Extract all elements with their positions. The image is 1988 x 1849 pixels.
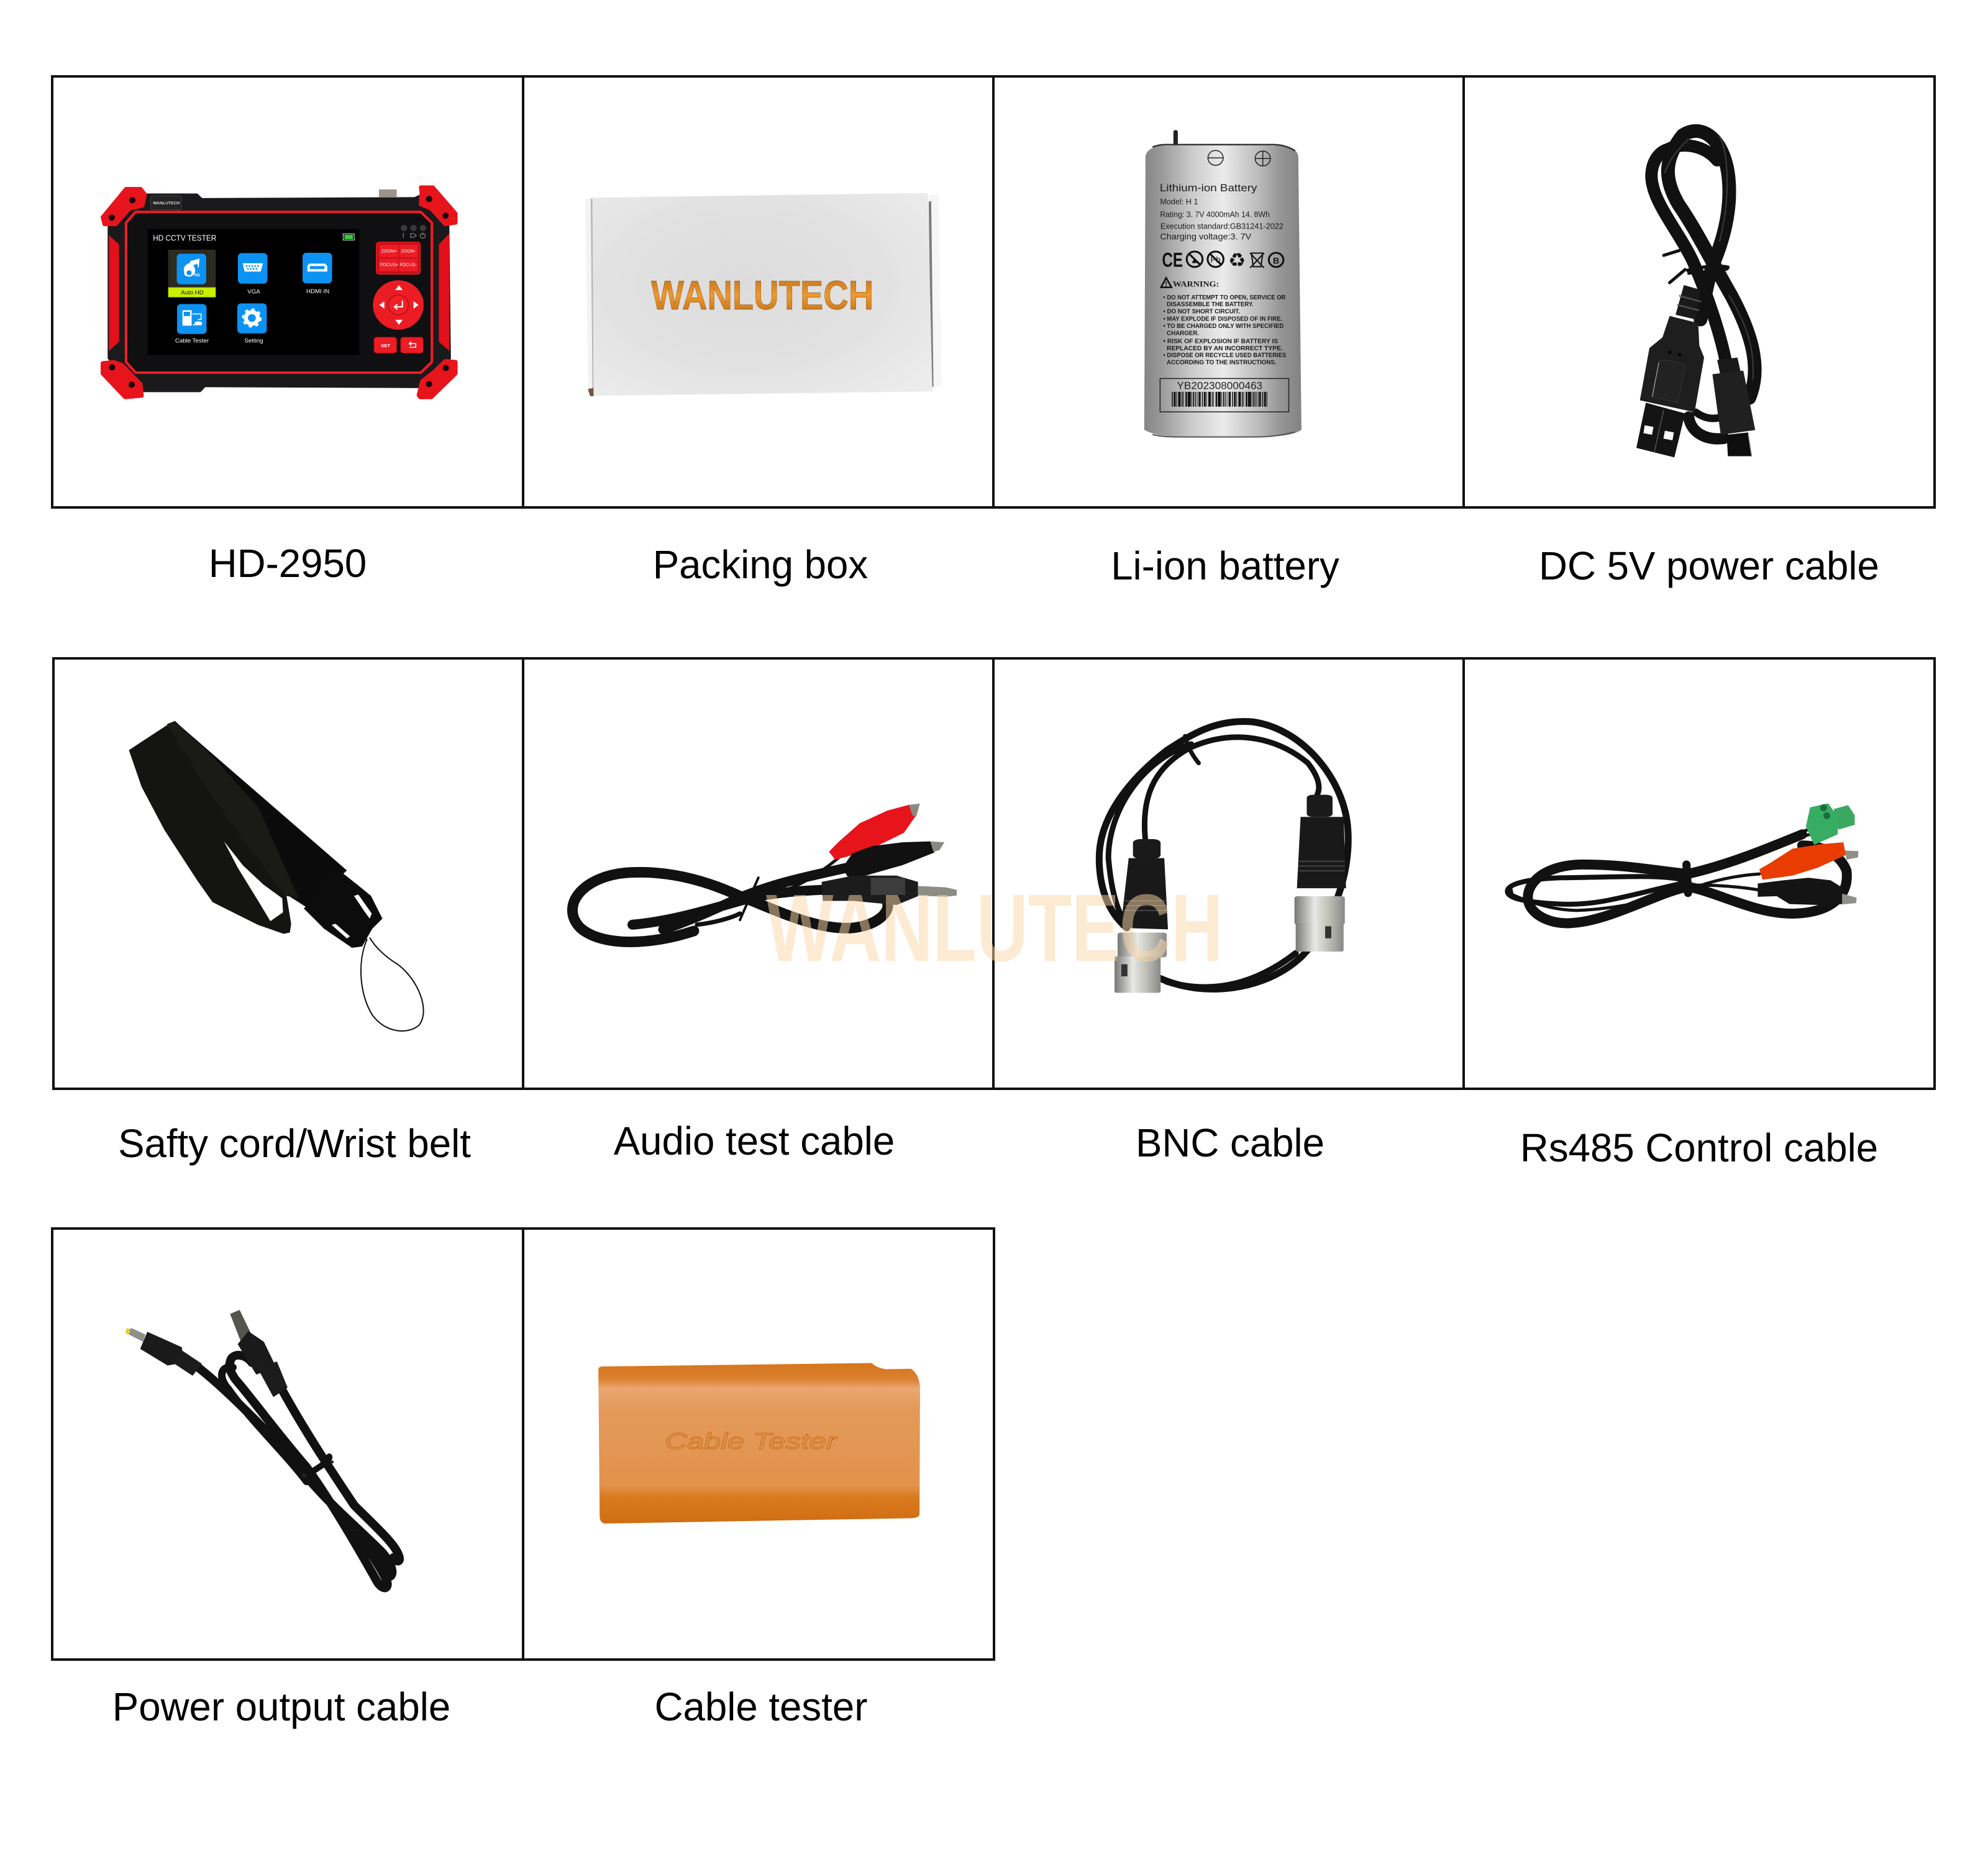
caption: Audio test cable (614, 1119, 895, 1163)
battery label text: Rating: 3. 7V 4000mAh 14. 8Wh (1160, 210, 1270, 219)
orange cable tester module (598, 1363, 920, 1524)
panel: BNC cable (993, 658, 1464, 1165)
caption: Packing box (653, 543, 868, 587)
device buttons (373, 242, 424, 353)
device screen: HDMI IN (306, 288, 329, 295)
device buttons: FOCUS- (399, 263, 417, 267)
panel: power output cable (52, 1229, 523, 1729)
device screen: HD (194, 274, 201, 278)
device buttons: FOCUS+ (380, 263, 398, 267)
panel: safety cord and wrist belt (53, 658, 523, 1166)
battery warning: • TO BE CHARGED ONLY WITH SPECIFIED (1163, 323, 1284, 330)
battery warning: • DO NOT SHORT CIRCUIT. (1163, 309, 1240, 315)
BNC cable with two connectors (1099, 722, 1348, 993)
molded label: Cable Tester (665, 1429, 837, 1454)
caption: HD-2950 (209, 542, 367, 586)
device screen: VGA (247, 289, 260, 296)
box brand text: WANLUTECH (651, 272, 873, 318)
panel frame (523, 658, 993, 1089)
panel: DC 5V power cable (1464, 76, 1935, 588)
battery warning: • DISPOSE OR RECYCLE USED BATTERIES (1163, 352, 1287, 359)
DC power cable (125, 1310, 399, 1588)
panel frame (1464, 76, 1935, 507)
device screen: Auto HD (181, 289, 204, 296)
battery barcode: YB202308000463 (1177, 380, 1262, 391)
battery warning: • DO NOT ATTEMPT TO OPEN, SERVICE OR (1163, 294, 1285, 301)
USB to Type-C cable (1636, 131, 1755, 457)
battery label text: Charging voltage:3. 7V (1160, 232, 1252, 242)
device buttons: ZOOM+ (381, 250, 397, 253)
panel frame (1464, 658, 1935, 1089)
panel: audio test cable (523, 658, 993, 1163)
device: HD CCTV tester (103, 187, 455, 398)
caption: BNC cable (1136, 1121, 1325, 1165)
caption: DC 5V power cable (1539, 544, 1879, 588)
panel: Li-ion battery (993, 76, 1464, 588)
battery warning: DISASSEMBLE THE BATTERY. (1167, 301, 1254, 308)
battery warning: • MAY EXPLODE IF DISPOSED OF IN FIRE. (1163, 316, 1283, 322)
white packing box (585, 193, 941, 396)
panel: HD-2950 (52, 76, 523, 586)
battery label text (1160, 181, 1284, 242)
watermark: WANLUTECH (766, 875, 1223, 981)
device buttons: ZOOM- (401, 250, 416, 253)
caption: Safty cord/Wrist belt (118, 1122, 471, 1166)
panel frame (993, 658, 1464, 1089)
caption: Power output cable (112, 1685, 450, 1729)
panel frame (53, 658, 523, 1089)
battery warning (1161, 278, 1287, 366)
RS485 cable with terminal block and clips (1507, 803, 1859, 923)
device buttons: SET (381, 343, 391, 348)
battery warning: ACCORDING TO THE INSTRUCTIONS. (1167, 360, 1277, 366)
panel frame (523, 76, 993, 507)
battery label text: Lithium-ion Battery (1160, 181, 1257, 194)
device screen (148, 229, 359, 355)
battery certification marks: ♻ (1228, 250, 1246, 271)
battery barcode (1160, 378, 1288, 412)
audio cable with clips (572, 804, 957, 942)
panel: cable tester (523, 1229, 994, 1729)
caption: Cable tester (655, 1685, 867, 1729)
caption: Rs485 Control cable (1520, 1126, 1878, 1170)
panel: Rs485 control cable (1464, 658, 1935, 1170)
lithium battery (1144, 130, 1302, 437)
battery certification marks: Pb (1211, 255, 1221, 264)
panel frame (52, 76, 523, 507)
device screen: Setting (244, 338, 263, 345)
battery warning: ! (1165, 280, 1167, 289)
safety cord loop (361, 938, 424, 1031)
battery warning: WARNING: (1173, 280, 1219, 289)
battery warning: CHARGER. (1167, 330, 1199, 337)
caption: Li-ion battery (1111, 544, 1339, 588)
battery warning: REPLACED BY AN INCORRECT TYPE. (1167, 345, 1283, 352)
panel frame (52, 1229, 523, 1660)
panel frame (523, 1229, 994, 1660)
wrist belt with safety cord (129, 721, 424, 1031)
battery certification marks: CE (1162, 249, 1183, 271)
battery label text: Model: H 1 (1160, 197, 1198, 206)
buckle (304, 871, 383, 948)
device: HD CCTV tester: WANLUTECH (153, 201, 180, 206)
battery certification marks: B (1273, 256, 1279, 265)
battery certification marks (1162, 249, 1284, 271)
panel frame (993, 76, 1464, 507)
device status LEDs (401, 225, 426, 239)
device screen: HD CCTV TESTER (153, 234, 216, 243)
battery label text: Execution standard:GB31241-2022 (1160, 222, 1284, 231)
battery certification marks: ▲ (1190, 255, 1200, 265)
device screen: Cable Tester (175, 338, 209, 345)
panel: packing box (523, 76, 993, 587)
battery warning: • RISK OF EXPLOSION IF BATTERY IS (1163, 338, 1279, 345)
